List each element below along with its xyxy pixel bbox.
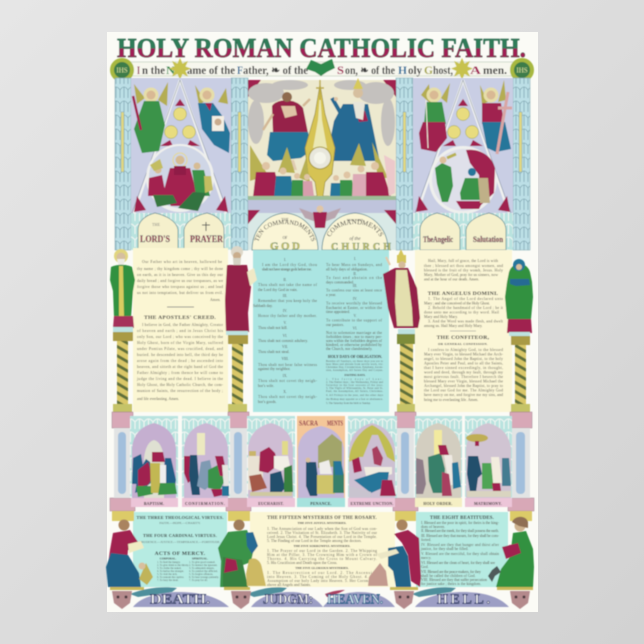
monstrance [305,80,335,204]
heading: Ten Commandments of God: of the [349,237,361,242]
banner: Hell: HELL. [437,592,490,608]
panel: eight beatitudes [416,512,508,587]
list: spiritual: 7. To pray for all. [189,579,208,582]
list: beatitudes: VIII. Blessed are they that suffer persecution [421,578,487,582]
list: beatitudes: for justice sake ; theirs is the kingdom. [421,582,481,586]
panel: commandments [253,250,389,412]
list: Precepts of the Church: the Church, nor clandestinely. [326,347,373,352]
text: Confiteor: angel, to blessed John the Baptist, to the holy [424,357,503,362]
right gothic pillars [396,78,530,250]
text: Angelus: Mary ; and she conceived of the Holy Ghost. [424,302,490,306]
text: glorious: into Heaven. 3. The Coming of the Holy Ghost. 4. The [267,575,377,579]
list: Ten Commandments: IV. [283,309,287,313]
list: spiritual [189,558,219,582]
figure: left bishop saint [110,249,135,332]
list: Precepts of the Church: 5. The Saturday from the birth to Sunday. [326,402,371,405]
list: Precepts of the Church: days commanded. [326,280,354,284]
list: beatitudes: God. [421,565,429,569]
text: Apostles' Creed: buried. he descended into hell, the third day he [137,353,223,358]
column: left bishop [113,332,133,412]
figure: Moses [225,246,257,335]
tracery triangle [134,80,226,213]
list: Ten Commandments: Thou shalt not covet thy neigh- [258,379,318,383]
text: sorrowful: 1. The Prayer of our Lord in the Garden. 2. The Whipping [267,549,377,553]
banner: Judgment [247,587,323,608]
list: Precepts of the Church: hear Mass and abstain from servile work, viz: [326,363,383,366]
list: Ten Commandments: V. [283,321,287,325]
list: Ten Commandments [253,258,318,404]
scene: Holy Order [415,416,462,498]
banner text: men. [483,65,507,77]
list: spiritual: 4. To comfort the afflicted. [189,570,218,573]
text: joyful: Lord Jesus Christ. 4. The Presentation of our Lord in the Temple. [267,535,377,539]
list: spiritual: SPIRITUAL. [192,558,208,560]
list: Precepts of the Church: To contribute to the support of [326,318,383,322]
banner: Hell [412,587,509,608]
heading: Ten Commandments of God [247,205,397,253]
text: Confiteor: Archangel, blessed John the Baptist, to pray to [424,384,503,389]
list: beatitudes: III. Blessed are they that mourn, for they shall be com- [421,534,500,539]
text: Hail Mary: thee ; blessed art thou amongst women, and [424,264,503,269]
subheading: joyful: THE FIVE JOYFUL MYSTERIES. [298,521,347,525]
text: Apostles' Creed: under Pontius Pilate, was crucified, dead, and [137,347,223,352]
banner: Heaven: HEAVEN. [327,592,383,608]
text: Confiteor: Apostles Peter and Paul, and to all the Saints, [424,362,503,366]
list: Precepts of the Church: Besides all Sundays, on these days you are to [326,360,384,363]
column: right veiled saint [511,336,530,412]
list: Precepts of the Church: 1. The forty days of Lent. [326,378,383,381]
text: Confiteor: most grievous fault. Therefore I beseech the [424,375,503,379]
column: Pope saint [397,334,415,412]
list: spiritual: 6. To bear wrongs patiently. [189,576,219,579]
figure: right veiled saint [505,259,533,336]
text: joyful: 5. The Finding of our Lord in the Temple among the doctors. [267,539,362,543]
holy days of obligation: HOLY DAYS OF OBLIGATION. [328,355,382,359]
panel: virtues and acts of mercy [133,512,227,587]
list: Ten Commandments: IX. [283,374,287,378]
list: Ten Commandments: III. [283,294,287,298]
sacrament pillars [110,412,534,511]
angel: green [133,82,168,153]
figure: Pope [329,78,379,161]
text: Apostles' Creed: judge the living and the dead. I believe in the [136,377,223,381]
text: Apostles' Creed: heaven, and sitteth at the right hand of God the [137,365,223,370]
banner text: ame of the [187,65,235,77]
left roundel: IHS [116,66,128,74]
label: Holy Order [415,498,462,507]
gold niches [112,511,532,521]
scene: Baptism [130,416,178,498]
list: spiritual: 1. To give good counsel. [189,561,216,564]
list: beatitudes: dom of heaven. [421,525,445,529]
angel: blue with veil [195,85,230,153]
heading: Confiteor: THE CONFITEOR, [437,335,490,341]
list: Precepts of the Church: FASTING DAYS. [345,374,366,377]
list: Ten Commandments: bor's goods. [258,400,277,404]
panel: mysteries of the rosary [250,512,395,587]
text: Apostles' Creed: Father Almighty ; from thence he will come to [137,371,223,375]
banner text: n the [142,65,165,77]
scene: Penance: MENTS [327,420,343,428]
list: Ten Commandments: Thou shalt not covet thy neigh- [258,395,318,399]
text: Angelus: 2. Behold the handmaid of the Lord ; be it [428,306,504,310]
list: corporal: 2. To give drink to the thirsty. [157,564,189,567]
banner: Death: DEATH. [150,592,210,608]
list: beatitudes: II. Blessed are the meek, for they shall possess the earth. [421,529,499,534]
mask: centre left [231,591,251,609]
figure: John with eagle [488,517,534,590]
text: joyful [267,527,378,543]
text: Hail Mary: Mary, Mother of God, pray for us sinners, now [424,273,498,278]
figure: Mark with lion [218,520,266,590]
mask: right [510,591,530,609]
list: Precepts of the Church: Saturday in the four seasons of the year. [326,384,383,387]
adoring angels right [330,142,395,197]
label: Confirmation [182,498,228,507]
list: Precepts of the Church: I. [354,257,356,261]
text: faith hope charity: FAITH.—HOPE.—CHARITY. [159,521,201,525]
figure: Pope saint [383,249,420,334]
text: Lord's Prayer: Our Father who art in heaven, hallowed be [142,260,222,265]
text: Hail Mary: blessed is the fruit of thy womb, Jesus. Holy [424,268,503,274]
list: Precepts of the Church: sons within the forbidden degrees of [326,339,383,343]
adoring angels left [250,145,314,197]
label: Baptism [131,498,178,507]
banner text: host, [433,65,453,77]
list: Precepts of the Church: forbidden times ; nor to marry per- [326,335,383,339]
text: glorious: 1. The Resurrection of our Lord. 2. The Ascension [267,571,377,575]
figure: Matthew with angel [106,520,153,590]
heading: Eight Beatitudes: THE EIGHT BEATITUDES. [430,516,494,521]
text: Lord's Prayer: on earth, as it is in heaven. Give us this day our [137,273,224,278]
text: sorrowful: Him at the Pillar. 3. The Crowning Him with a Crown of [267,553,378,557]
text: sorrowful [267,549,378,565]
list: Ten Commandments: Sabbath day. [253,304,273,308]
title: HOLY ROMAN CATHOLIC FAITH. [117,33,526,63]
list: Ten Commandments: VIII. [281,357,289,361]
text: Lord's Prayer: us not into temptation, but deliver us from evil. [137,291,223,296]
heading: Four Cardinal Virtues: THE FOUR CARDINAL VIRTUES. [143,533,217,538]
list: beatitudes: forted. [421,538,431,542]
heading: Lord's Prayer arches [131,213,231,250]
text: joyful: 1. The Annunciation of our Lady when the Son of God was con- [267,527,378,531]
list: Precepts of the Church: IV. [353,297,357,301]
list: Ten Commandments: against thy neighbor. [258,367,291,371]
list: Precepts of the Church: III. [353,284,357,288]
list: beatitudes: justice, for they shall be filled. [420,547,468,552]
list: Precepts of the Church: 3. The Vigils of Whitsuntide, St. Peter and St. [326,387,383,390]
heading: Acts of Mercy: ACTS OF MERCY. [155,551,206,557]
text: Hail Mary: and at the hour of our death. Amen. [424,278,479,282]
list: Precepts of the Church: time appointed. [326,310,350,314]
text: Hail Mary: Hail, Mary, full of grace, the Lord is with [428,259,498,264]
star left [169,58,191,80]
list: Ten Commandments: Thou shalt not kill. [258,326,288,330]
figure: Christ [263,92,312,170]
list: beatitudes: V. Blessed are the merciful, for they shall obtain [421,552,499,557]
list: beatitudes [420,521,500,586]
text: Confiteor: word and deed, through my fault, through my [424,370,503,376]
text: Lord's Prayer: daily bread ; and forgive us our trespasses, as we [137,279,223,284]
dove and green leaves [306,59,335,76]
label: Matrimony [465,498,512,507]
label: Confirmation: CONFIRMATION. [185,502,225,506]
list: Precepts of the Church: the Bishop may appoint as a fast or abstinence. [326,398,383,401]
text: Confiteor: the Lord our God for me. The Almighty God [424,388,503,392]
text: Confiteor: I confess to Almighty God, to the blessed [428,348,503,353]
list: corporal [157,558,189,582]
list: Ten Commandments: Thou shalt not commit adultery. [258,339,308,343]
list: Ten Commandments: VI. [283,334,287,338]
text: Angelus: 3. And the Word was made flesh, and dwelt [428,320,504,324]
list: Precepts of the Church: Christmas Day, Circumcision, Epiphany, Ascen- [326,366,383,369]
text: glorious: above all Angels and Saints. [267,583,311,587]
text: Apostles' Creed: arose again from the dead ; he ascended into [137,359,223,363]
text: Apostles' Creed: I believe in God, the Father Almighty, Creator [142,323,224,328]
text: Angelus: Mary and Holy Mary. [424,315,458,319]
star right [451,58,473,80]
list: Ten Commandments: X. [283,390,287,394]
text: Lord's Prayer: forgive those who trespass against us ; and lead [137,285,223,289]
label: Baptism: BAPTISM. [144,502,164,506]
list: Precepts of the Church: sion, Assumption, All Saints Day and Corpus. [326,369,383,372]
heading: Ten Commandments of God: GOD [270,240,300,252]
scene: Penance: SACRA [299,420,318,428]
text: sorrowful: 5. His Crucifixion and Death upon the Cross. [267,561,337,565]
list: beatitudes: VI. Blessed are the clean of heart, for they shall see [421,561,495,566]
heading: Ten Commandments of God: COMMANDMENTS [326,219,384,237]
panel: Hail Mary, Angelus, Confiteor [415,250,512,412]
text: Angelus: among us. Hail Mary and Holy Mary. [424,324,483,328]
text: glorious [267,571,377,587]
list: Ten Commandments: II. [283,278,287,282]
medallion: Holy Family [146,144,214,212]
label: Holy Order: HOLY ORDER. [423,502,453,506]
list: Precepts of the Church: To hear Mass on Sundays, and [326,263,382,268]
list: Precepts of the Church: V. [353,314,357,318]
list: Precepts of the Church: Eucharist at Easter, or within the [326,306,382,311]
list: Precepts of the Church: VI. [353,326,357,330]
figure: Luke with ox [368,520,421,590]
list: Precepts of the Church: kindred, or otherwise prohibited by [326,343,382,348]
banner text: ather, ❧ of the [243,65,308,77]
text: Confiteor: blessed Mary ever Virgin, blessed Michael the [424,380,503,384]
list: Ten Commandments: Thou shalt not steal. [258,350,290,354]
text: Confiteor: Mary ever Virgin, to blessed Michael the Arch- [424,352,504,358]
banner text: I [137,65,140,77]
list: Precepts of the Church [326,257,384,405]
text: Apostles' Creed [136,323,224,401]
text: Apostles' Creed: and life everlasting. Amen. [137,397,179,401]
clouds with cherubs [248,80,395,146]
heading: Ten Commandments of God: TEN COMMANDMENTS [254,219,316,242]
list: corporal: 1. To feed the hungry. [157,561,181,564]
text: glorious: Assumption of our holy Lady into Heaven. 5. Her Coronation [267,579,377,583]
list: Precepts of the Church: To receive worthily the blessed [326,302,382,306]
text: sorrowful: Thorns. 4. His Carrying the Cross to Mount Calvary. [267,557,377,561]
label: Extreme Unction [348,498,395,507]
heading: Ten Commandments of God: THE [281,218,289,222]
list: Ten Commandments: shalt not have strange gods before me. [262,268,312,272]
list: Precepts of the Church: 2. The Ember days : the Wednesday, Friday and [326,381,384,384]
angel: crimson and blue with cross [480,80,512,154]
mask: left [112,591,132,609]
list: Precepts of the Church: II. [353,272,357,276]
banner text: A [470,65,482,77]
text: Lord's Prayer [137,260,224,302]
spandrels [134,196,228,212]
text: Apostles' Creed: munion of Saints, the resurrection of the body ; [137,389,223,394]
angel: green and crimson [419,83,450,152]
heading: Lord's Prayer arches: PRAYER [190,234,223,244]
text: Apostles' Creed: Holy Ghost, the Holy Catholic Church, the com- [137,383,224,388]
heading: Angelus Domini: THE ANGELUS DOMINI. [428,291,499,297]
list: Ten Commandments: Honor thy father and thy mother. [258,314,317,318]
heading: Angelic Salutation arches [413,213,513,250]
list: spiritual: 2. To instruct the ignorant. [189,564,218,567]
list: Ten Commandments: Thou shalt not take the name of [258,283,318,287]
banner: Judgment: JUDGM: [263,592,313,608]
bottom section [106,511,534,590]
text: Angelus [424,297,504,328]
left roundel [110,58,134,82]
column: Moses [228,335,248,412]
list: Precepts of the Church: Not to solemnize marriage at the [326,331,382,335]
label: Penance [297,498,345,507]
scene: Eucharist [247,416,295,498]
heading: Three Theological Virtues: THE THREE THEOLOGICAL VIRTUES. [136,515,224,520]
scene: Extreme Unction [348,416,397,498]
banner text [137,65,507,77]
list: beatitudes: mercy. [421,556,431,560]
subheading: glorious: THE FIVE GLORIOUS MYSTERIES. [295,566,349,570]
heading: Angelic Salutation arches: TheAngelic [423,235,453,244]
label: Eucharist [247,498,295,507]
panel: right angels and Annunciation [413,78,513,214]
list: Ten Commandments: the Lord thy God in vain. [258,288,298,292]
banner: last things [112,587,530,609]
scene: Matrimony [465,416,512,498]
text: Lord's Prayer: thy name ; thy kingdom come ; thy will be done [137,267,223,271]
banner text: on, ❧ of the [345,65,395,77]
list: Ten Commandments: bor's wife. [258,384,274,388]
text: joyful: ceived. 2. The Visitation of St. Elizabeth. 3. The Nativity of our [267,531,378,535]
list: Precepts of the Church: To fast and abstain on the [326,276,382,280]
label: Penance: PENANCE. [310,502,332,506]
list: Precepts of the Church: 4. All Fridays in the year, and the other days [326,394,383,397]
panel: central Christ and Pope with monstrance [248,78,396,213]
text: Hail Mary [424,259,503,282]
label: Matrimony: MATRIMONY. [474,502,502,506]
text: Angelus: done unto me according to thy word. Hail [424,310,499,314]
list: corporal: 3. To clothe the naked. [157,567,182,570]
heading: Lord's Prayer arches: LORD'S [140,234,170,244]
spandrels [416,196,510,212]
list: Precepts of the Church: all holy days of obligation. [326,268,368,272]
right roundel: IHS [516,66,528,74]
list: Ten Commandments: Thou shalt not bear false witness [258,363,317,367]
heading: Fifteen Mysteries: THE FIFTEEN MYSTERIES OF THE ROSARY. [267,516,377,521]
text: Confiteor: that I have sinned exceedingly, in thought, [424,366,503,371]
central angel [299,206,341,228]
subheading: sorrowful: THE FIVE SORROWFUL MYSTERIES. [293,544,351,548]
list: corporal: 6. To ransom the captive. [157,576,184,579]
list: beatitudes: I. Blessed are the poor in spirit, for theirs is the king- [421,521,500,526]
heading: Lord's Prayer arches: THE [152,222,160,227]
text: Apostles' Creed: of heaven and earth ; and in Jesus Christ his [137,329,223,333]
sacraments band [110,412,534,511]
text: prudence justice temperance fortitude: PRUDENCE.—JUSTICE.—TEMPERANCE.—FORTITUDE. [140,540,221,544]
list: Precepts of the Church: our pastors. [326,323,344,327]
banner text: S [337,65,344,77]
invocation banner [110,58,534,82]
yellow trefoil [164,108,196,138]
text: Confiteor [424,348,504,402]
text: Apostles' Creed: only Son, our Lord ; who was conceived by the [137,335,223,340]
left gothic pillars [115,78,248,250]
text: Apostles' Creed: Holy Ghost, born of the Virgin Mary, suffered [137,341,223,346]
banner text: oly [408,65,422,77]
list: Ten Commandments: I. [284,258,286,262]
label: Extreme Unction: EXTREME UNCTION. [350,502,394,506]
tracery triangle [417,80,509,213]
list: Ten Commandments: VII. [282,345,288,349]
list: Precepts of the Church: a year. [326,293,336,297]
list: beatitudes: VII. Blessed are the peace-makers, for they [421,570,481,575]
heading: Ten Commandments of God: CHURCH [331,242,391,253]
heading: Ten Commandments of God: PRECEPTS [347,218,363,222]
text: Lord's Prayer: Amen. [210,298,221,302]
list: corporal: 7. To bury the dead. [157,579,179,582]
panel: Lord's Prayer and Apostles' Creed [133,248,228,412]
text: Confiteor: have mercy on me, and forgive me my sins, and [424,393,503,398]
panel: left angels and Holy Family [131,78,231,213]
subheading: general confession: OR GENERAL CONFESSION. [438,342,488,346]
list: Precepts of the Church: Paul, the Assumption, All Saints, Christmas. [326,390,383,393]
banner text: N [166,65,176,77]
right roundel [510,58,534,82]
list: Ten Commandments: Remember that you keep holy the [258,299,317,303]
scene: Penance [297,416,345,498]
heading: Angelic Salutation arches: Salutation [473,235,503,244]
list: beatitudes: shall be called the children of God. [421,574,476,578]
list: corporal: 5. To visit the sick. [157,573,178,576]
label: Eucharist: EUCHARIST. [258,502,284,506]
banner text: H [398,65,407,77]
list: Ten Commandments: I am the Lord thy God, thou [262,263,317,268]
medallion: Annunciation [429,146,497,214]
list: corporal: 4. To harbor the stranger. [157,570,184,573]
poster sheet [107,32,538,612]
text: Confiteor: bring me to everlasting life. Amen. [424,398,478,402]
heading: Apostles' Creed: THE APOSTLES' CREED. [144,315,216,321]
mask: centre right [394,591,414,609]
list: Precepts of the Church: To confess our sins at least once [326,288,382,292]
banner text: G [424,65,433,77]
balustrade [248,196,396,200]
banner text: F [237,65,243,77]
list: corporal: CORPORAL. [160,558,177,560]
text: Angelus: 1. The Angel of the Lord declared unto [428,297,503,301]
scene: Confirmation [182,416,230,498]
heading: Ten Commandments of God: OF [283,236,287,240]
yellow trefoil [448,108,478,138]
banner: Death [130,587,229,608]
list: beatitudes: IV. Blessed are they that hunger and thirst after [421,543,500,547]
list: spiritual: 5. To forgive offences. [189,573,214,576]
list: spiritual: 3. To admonish sinners. [189,567,215,570]
